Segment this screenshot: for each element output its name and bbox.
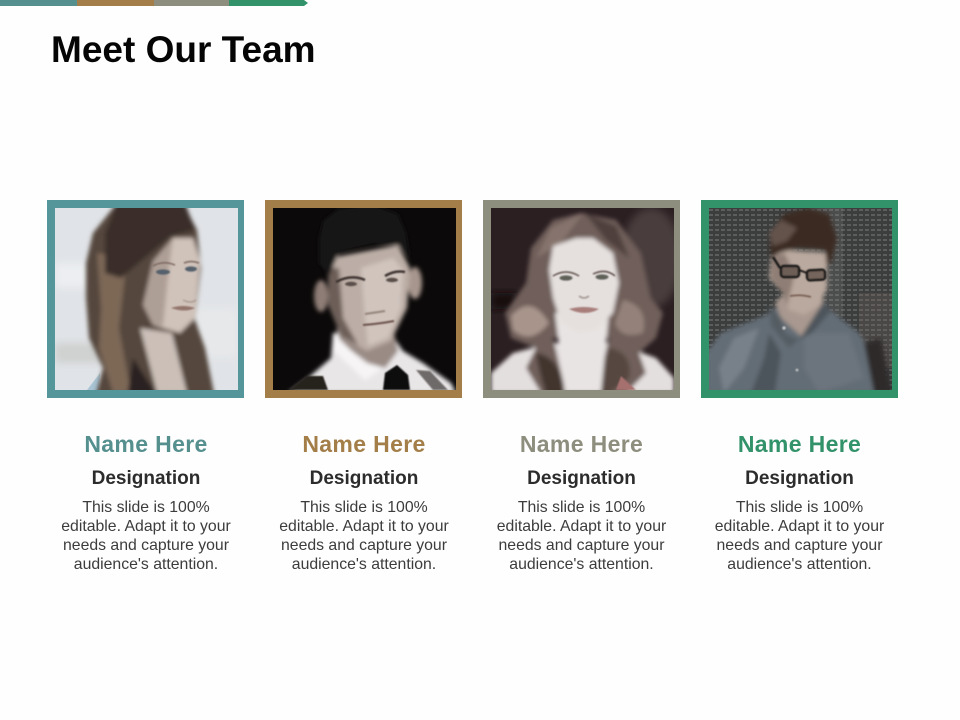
description: audience's attention.: [292, 556, 436, 573]
description: needs and capture your: [498, 537, 664, 554]
description: [279, 499, 449, 573]
description: needs and capture your: [281, 537, 447, 554]
top colour bar: [0, 0, 308, 6]
description: editable. Adapt it to your: [715, 518, 884, 535]
description: audience's attention.: [509, 556, 654, 573]
name: Name Here: [302, 431, 426, 457]
photo: man with glasses and denim shirt: [709, 208, 892, 390]
description: editable. Adapt it to your: [61, 518, 231, 535]
description: needs and capture your: [63, 537, 229, 554]
description: editable. Adapt it to your: [497, 518, 666, 535]
designation: Designation: [527, 468, 636, 489]
panel: photo frame 4: [701, 200, 898, 398]
name: Name Here: [520, 431, 643, 457]
photo: man in white shirt and tie: [273, 208, 456, 390]
description: This slide is 100%: [518, 499, 645, 516]
description: This slide is 100%: [736, 499, 863, 516]
name: Name Here: [738, 431, 861, 457]
team member 3 text: [497, 431, 666, 573]
description: [61, 499, 231, 573]
designation: Designation: [745, 468, 854, 489]
description: [497, 499, 666, 573]
designation: Designation: [310, 468, 418, 489]
name: Name Here: [84, 431, 208, 457]
description: This slide is 100%: [300, 499, 428, 516]
description: [715, 499, 884, 573]
photo: woman with long curly hair: [491, 208, 674, 390]
description: audience's attention.: [74, 556, 218, 573]
description: This slide is 100%: [82, 499, 210, 516]
photo: woman with long straight hair: [55, 208, 238, 390]
designation: Designation: [92, 468, 200, 489]
team member 2 text: [279, 431, 449, 573]
team member 1 text: [61, 431, 231, 573]
description: editable. Adapt it to your: [279, 518, 449, 535]
team member 4 text: [715, 431, 884, 573]
description: needs and capture your: [716, 537, 882, 554]
description: audience's attention.: [727, 556, 872, 573]
panel: photo frame 3: [483, 200, 680, 398]
panel: photo frame 1: [47, 200, 244, 398]
panel: photo frame 2: [265, 200, 462, 398]
title: Meet Our Team: [51, 29, 316, 70]
